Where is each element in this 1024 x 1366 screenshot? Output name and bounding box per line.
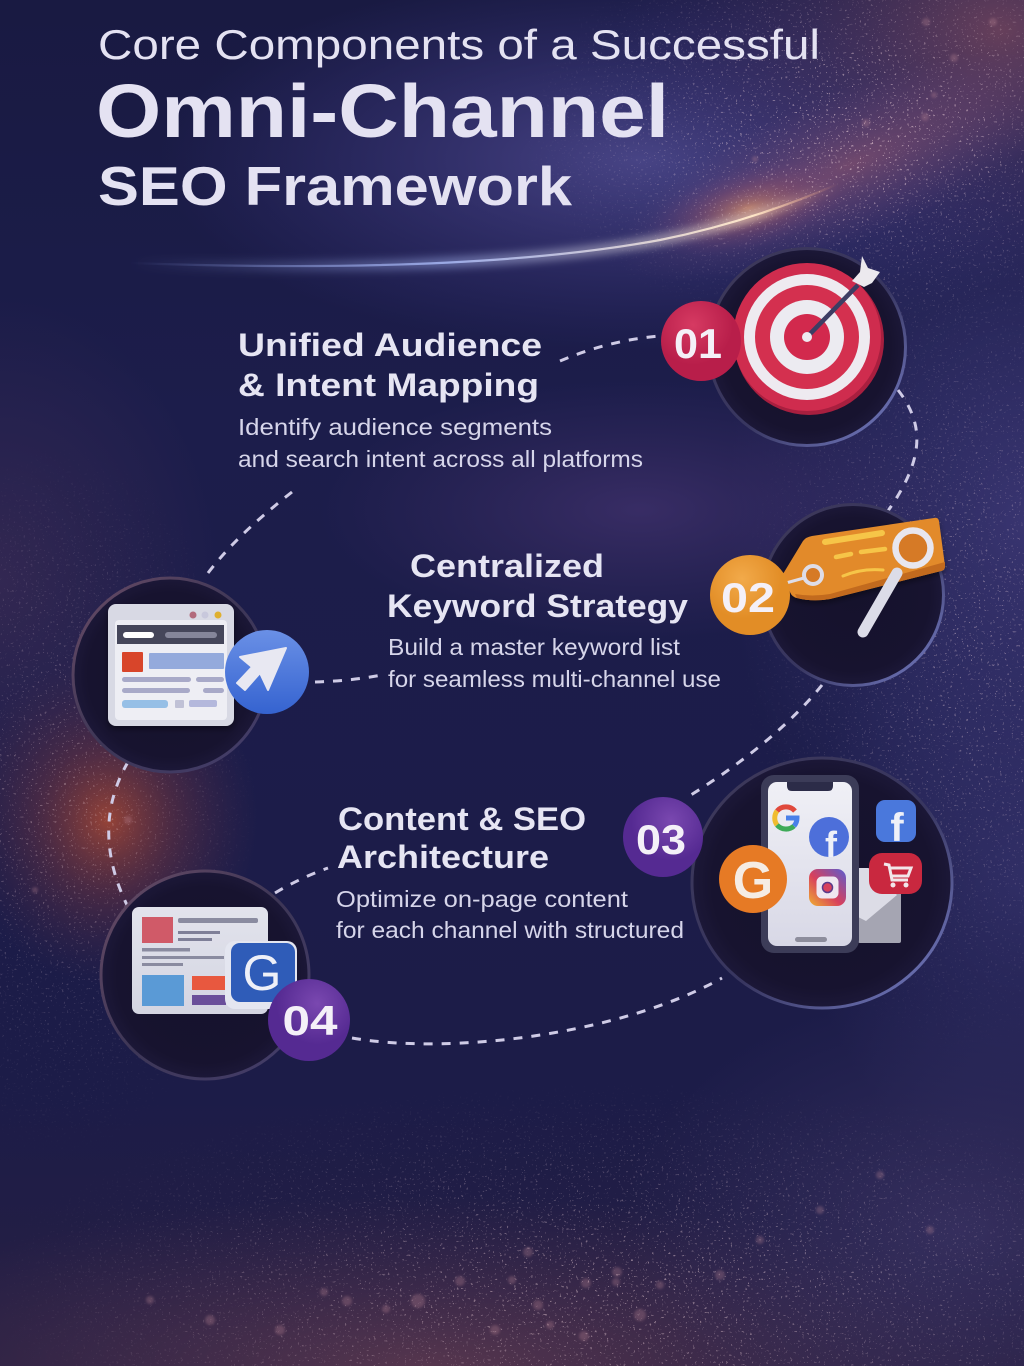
- text block: step 2: for seamless multi-channel use: [388, 666, 721, 692]
- text block: step 1: Identify audience segments: [238, 414, 552, 440]
- panel: step 01 target: [661, 248, 906, 446]
- text block: step 1: [238, 327, 643, 472]
- badge: 03: [623, 797, 703, 877]
- text block: step 2: Centralized: [410, 548, 604, 584]
- text block: step 3: Content & SEO: [338, 801, 586, 837]
- icon: G card: [225, 941, 297, 1009]
- horizon light arc: [130, 184, 838, 266]
- icon: smartphone: [761, 775, 859, 953]
- panel: step 04 document: [101, 871, 350, 1079]
- panel: step 03 channels: [623, 758, 952, 1008]
- title: Omni-Channel: [96, 69, 669, 153]
- panel: step 02 tag: [710, 504, 945, 686]
- title: Core Components of a Successful: [98, 21, 820, 68]
- text block: step 3: Optimize on-page content: [336, 886, 629, 912]
- icon: envelope: [858, 868, 901, 943]
- icon: facebook circle: [809, 817, 849, 865]
- badge: 04: [268, 979, 350, 1061]
- text block: step 1: Unified Audience: [238, 327, 542, 363]
- title: [96, 21, 820, 217]
- badge: 01: 01: [674, 320, 722, 367]
- badge: 02: [710, 555, 790, 635]
- dashed connector path: [109, 336, 917, 1044]
- text block: step 2: [387, 548, 721, 692]
- text block: step 1: & Intent Mapping: [238, 367, 539, 403]
- icon: shopping cart: [869, 853, 922, 894]
- icon: instagram: [809, 869, 846, 906]
- icon: browser window: [108, 604, 234, 726]
- icon: facebook square: f: [890, 806, 904, 850]
- icon: facebook square: [876, 800, 916, 850]
- badge: 02: 02: [721, 574, 775, 621]
- icon: G card: G: [243, 945, 281, 1001]
- icon: small google G: [775, 807, 797, 829]
- text block: step 2: Keyword Strategy: [387, 588, 688, 624]
- badge: 04: 04: [282, 997, 338, 1044]
- panel: browser with cursor: [73, 578, 309, 772]
- icon: keyword tag with magnifier: [783, 518, 945, 632]
- icon: target with arrow: [733, 256, 884, 415]
- icon: web page document: [132, 907, 268, 1014]
- icon: blue cursor badge: [225, 630, 309, 714]
- text block: step 3: Architecture: [337, 839, 549, 875]
- text block: step 3: [336, 801, 684, 943]
- icon: facebook circle: f: [825, 824, 838, 865]
- text block: step 2: Build a master keyword list: [388, 634, 681, 660]
- title: SEO Framework: [98, 155, 572, 217]
- badge: 01: [661, 301, 741, 381]
- icon: orange G badge: [719, 845, 787, 913]
- text block: step 1: and search intent across all platforms: [238, 446, 643, 472]
- text block: step 3: for each channel with structured: [336, 917, 684, 943]
- badge: 03: 03: [636, 816, 686, 863]
- icon: orange G badge: G: [733, 852, 773, 910]
